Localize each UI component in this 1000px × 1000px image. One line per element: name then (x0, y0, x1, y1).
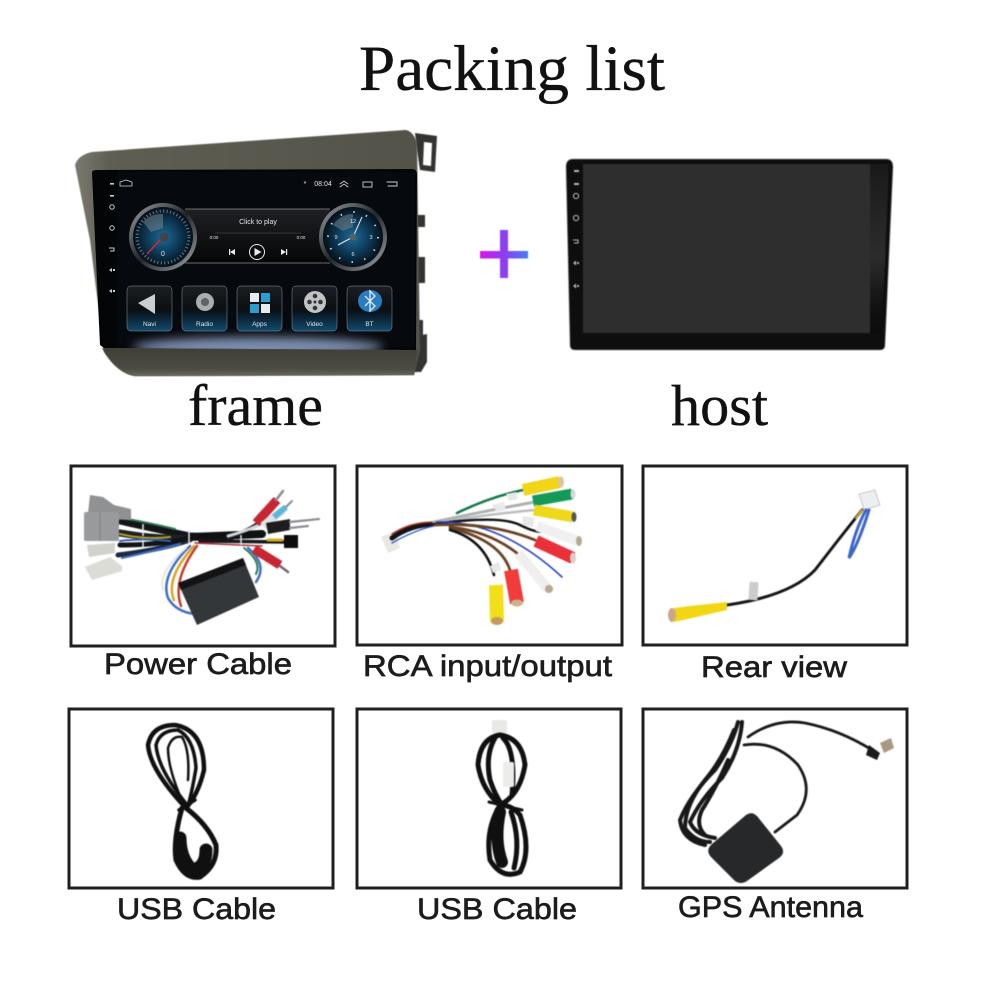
coiled USB cable illustration (148, 725, 216, 877)
frame bezel (75, 130, 420, 376)
title: Packing list (359, 33, 665, 105)
clock gauge: 3 (369, 235, 373, 241)
app tile: Radio (182, 286, 227, 331)
label: USB Cable 2: USB Cable (417, 893, 577, 926)
status bar: * (304, 181, 307, 188)
app tile: BT (347, 286, 392, 331)
app tile: Navi (127, 286, 172, 331)
label: Power Cable: Power Cable (104, 648, 292, 681)
app tile: Navi: Navi (143, 321, 156, 328)
speedometer gauge: 0 (161, 251, 165, 258)
panel: GPS antenna (643, 709, 907, 888)
app tile: Video: Video (306, 321, 323, 328)
host body (566, 159, 893, 350)
rear view cable illustration (668, 490, 880, 622)
host display (583, 164, 870, 333)
music player panel: Click to play (239, 219, 277, 226)
head unit screen (92, 169, 417, 357)
status bar: 08:04 (314, 181, 332, 188)
clock gauge: 12 (350, 219, 356, 225)
app tile: Radio: Radio (196, 321, 213, 328)
power harness illustration (84, 491, 319, 625)
label: host: host (671, 373, 768, 438)
app tile: Video (292, 286, 337, 331)
label: Rear view: Rear view (701, 651, 847, 684)
panel: RCA input/output (357, 466, 622, 645)
clock gauge (319, 203, 387, 271)
RCA harness illustration (381, 476, 582, 625)
clock gauge: 6 (351, 252, 355, 258)
label: RCA input/output: RCA input/output (363, 650, 613, 683)
frame lower lip (102, 348, 418, 376)
panel: rear view (643, 466, 907, 645)
screen bottom glow (126, 327, 390, 350)
GPS antenna illustration (680, 722, 894, 883)
coiled USB cable with connector illustration (478, 720, 526, 874)
panel: USB cable 1 (69, 709, 333, 888)
host side button icons (573, 170, 579, 288)
plus sign (480, 230, 528, 278)
app tile: Apps (237, 286, 282, 331)
label: GPS Antenna: GPS Antenna (678, 891, 863, 924)
label: frame: frame (188, 373, 323, 438)
app tile: BT: BT (365, 321, 374, 328)
music player panel: 0:00 (297, 235, 306, 240)
panel: power cable (71, 466, 335, 646)
label: USB Cable 1: USB Cable (117, 893, 276, 926)
panel: frame product photo (75, 130, 437, 376)
panel: host screen unit (566, 159, 893, 350)
panel: USB cable 2 (357, 709, 621, 888)
frame mounting brackets (412, 133, 437, 372)
music player panel: 0:00 (210, 235, 219, 240)
speedometer gauge (129, 203, 197, 271)
host right band (870, 164, 889, 333)
side button icons (109, 183, 115, 293)
clock gauge: 9 (334, 235, 338, 241)
app tile: Apps: Apps (252, 321, 268, 328)
status bar (120, 180, 397, 188)
music player panel (185, 209, 330, 263)
